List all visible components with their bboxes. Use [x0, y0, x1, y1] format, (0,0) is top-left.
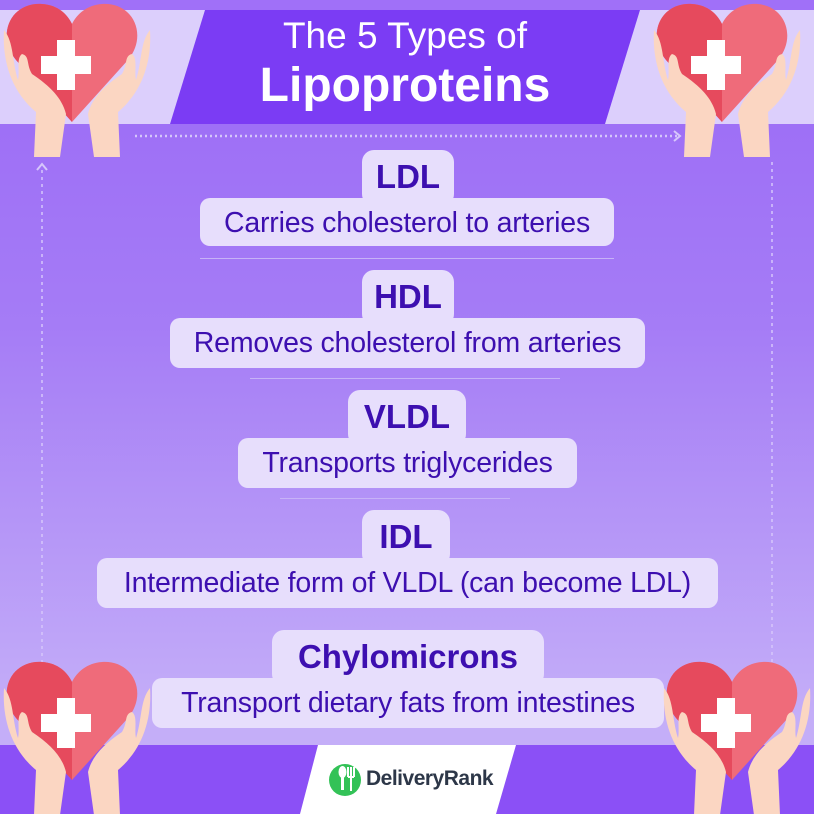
icon: heart top-left	[4, 4, 150, 157]
logo text: DeliveryRank	[366, 767, 493, 790]
icon: heart top-right	[654, 4, 800, 157]
item: Chylomicrons: Chylomicrons	[298, 638, 518, 675]
item: IDL: Intermediate form of VLDL (can become LDL)	[124, 567, 691, 599]
item: HDL: Removes cholesterol from arteries	[194, 327, 621, 359]
item: LDL	[200, 150, 614, 246]
icon: logo	[329, 764, 361, 796]
item: IDL: IDL	[379, 518, 433, 555]
icon: heart bottom-left	[4, 662, 150, 814]
item: Chylomicrons	[152, 630, 664, 728]
bottom band	[0, 745, 814, 814]
item: VLDL: VLDL	[364, 398, 450, 435]
logo box	[300, 745, 516, 814]
item: VLDL	[238, 390, 577, 488]
item: HDL: HDL	[374, 278, 442, 315]
top band	[0, 10, 814, 124]
item: LDL: Carries cholesterol to arteries	[224, 207, 590, 239]
item: HDL	[170, 270, 645, 368]
title text: Lipoproteins	[260, 59, 550, 112]
item: LDL: LDL	[376, 158, 440, 195]
item: VLDL: Transports triglycerides	[262, 447, 553, 479]
icon: heart bottom-right	[664, 662, 810, 814]
title text: The 5 Types of	[283, 15, 527, 56]
item: Chylomicrons: Transport dietary fats from intestines	[181, 687, 635, 719]
title banner	[170, 10, 640, 124]
item: IDL	[97, 510, 718, 608]
title text	[260, 15, 550, 112]
